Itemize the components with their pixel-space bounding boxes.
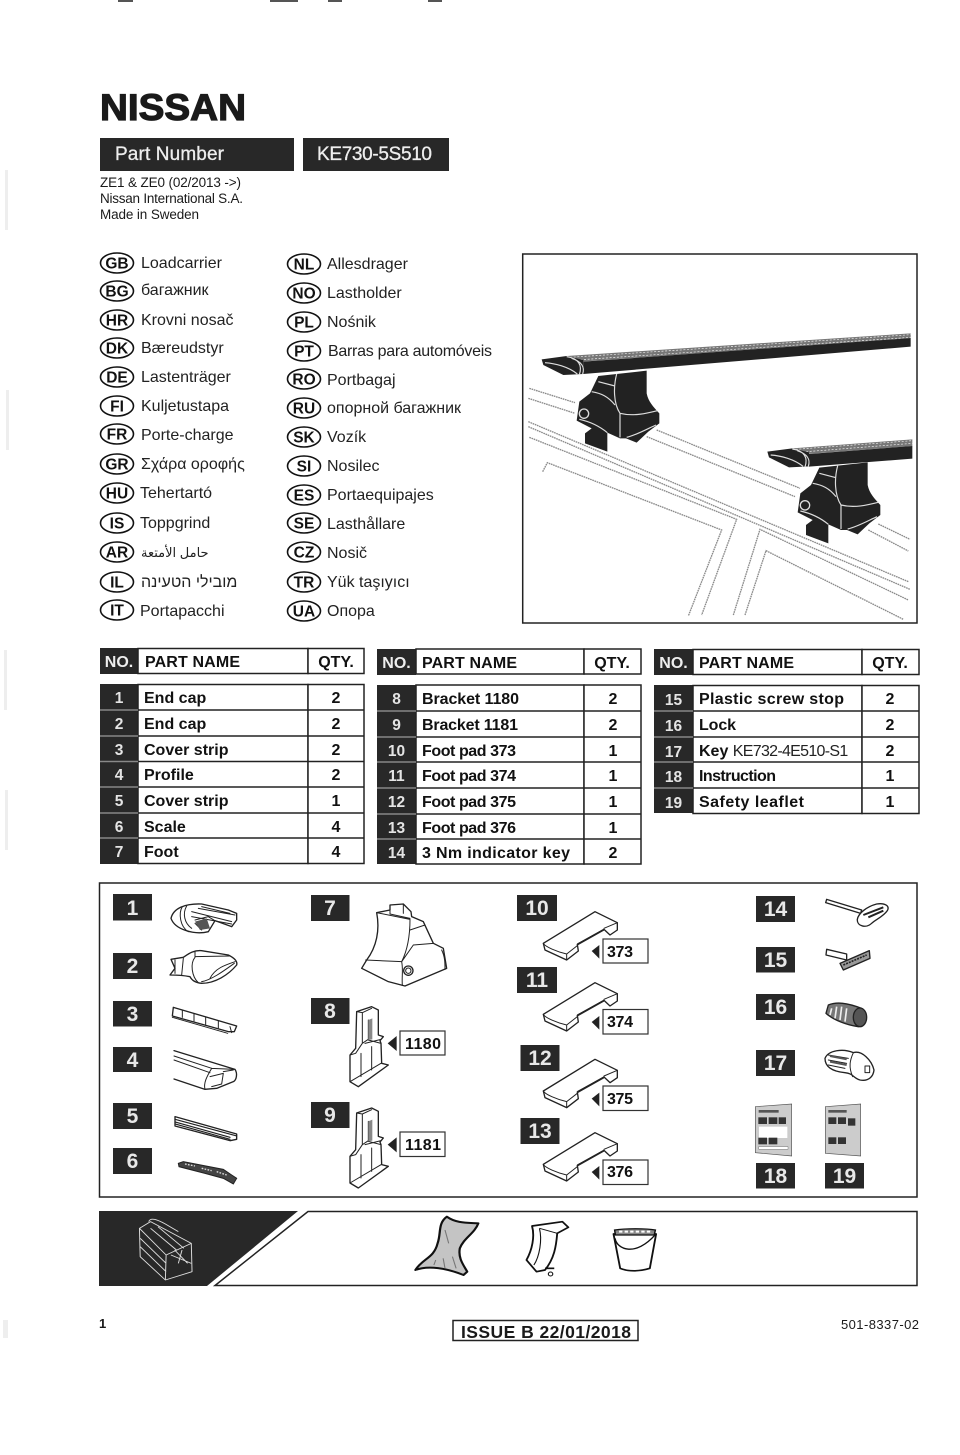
language list: right column: Nosilec — [327, 458, 379, 475]
labels: foot pad codes: 376 — [607, 1164, 633, 1181]
number badges: parts 10 to 19: 15 — [764, 949, 787, 972]
number badges: parts 10 to 19: 11 — [526, 969, 548, 992]
table: parts 1 to 7: PART NAME — [145, 654, 240, 671]
labels: foot pad codes: 373 — [607, 944, 633, 961]
scan marks — [3, 0, 442, 1338]
number badges: parts 1 to 9: 6 — [127, 1150, 138, 1173]
language list: right column: Lastholder — [327, 285, 402, 302]
language list: right column: RO — [292, 372, 316, 388]
number badges: parts 10 to 19: 12 — [528, 1047, 552, 1070]
rows 15 to 19 — [654, 685, 919, 814]
table: parts 8 to 14: QTY. — [594, 655, 630, 672]
language list: right column: NO — [292, 286, 316, 302]
part number value — [303, 138, 449, 171]
number badges: parts 1 to 9 — [113, 894, 350, 1174]
part 13: foot pad 376 — [543, 1133, 617, 1181]
language list: right column: SE — [294, 516, 314, 532]
rows 8 to 14: 2 — [609, 691, 618, 708]
document number: 501-8337-02 — [841, 1317, 919, 1332]
rows 15 to 19: 1 — [886, 768, 895, 785]
part 15: plastic screw stop — [826, 949, 870, 970]
rows 1 to 7: Cover strip — [144, 793, 229, 810]
label: 1181 — [400, 1132, 445, 1156]
language list: left column: багажник — [141, 282, 210, 299]
number badges: parts 1 to 9: 4 — [127, 1049, 139, 1072]
number badges: parts 10 to 19 — [517, 895, 864, 1188]
rows 8 to 14: Foot pad 375 — [422, 794, 516, 811]
roof bar: rear — [542, 333, 911, 375]
language list: left column: Loadcarrier — [141, 255, 223, 272]
part 7: foot — [362, 904, 447, 986]
rows 15 to 19: Safety leaflet — [699, 794, 805, 811]
table: parts 15 to 19 — [654, 649, 919, 814]
part 4: profile — [174, 1051, 237, 1089]
number badges: parts 10 to 19: 17 — [764, 1052, 787, 1075]
language list: right column: Lasthållare — [327, 515, 405, 533]
part 19: safety leaflet — [825, 1104, 861, 1156]
rows 1 to 7: 6 — [115, 819, 124, 836]
language list: right column: Allesdrager — [327, 256, 409, 273]
rows 8 to 14: 10 — [388, 743, 405, 760]
number badges: parts 1 to 9: 5 — [127, 1105, 139, 1128]
part number value: KE730-5S510 — [317, 144, 432, 165]
language list: right column: RU — [293, 400, 315, 418]
roof foot: rear — [577, 371, 659, 452]
roof bar: front — [767, 439, 912, 467]
panel: roof rack product illustration — [523, 254, 917, 623]
rows 1 to 7: Foot — [144, 844, 179, 861]
language list: left column: GB — [105, 256, 129, 272]
rows 1 to 7: 1 — [332, 793, 341, 810]
rows 15 to 19: Key KE732-4E510-S1 — [699, 743, 848, 760]
language list: right column: Vozík — [327, 429, 367, 446]
language list: right column: SK — [293, 430, 316, 446]
rows 8 to 14: 12 — [388, 794, 405, 811]
language list: right column: NL — [294, 256, 314, 274]
rows 15 to 19: Lock — [699, 717, 736, 734]
language list: left column: FI — [110, 398, 124, 416]
rows 8 to 14: 2 — [609, 717, 618, 734]
part 12: foot pad 375 — [543, 1059, 617, 1108]
part 6: scale — [178, 1162, 237, 1184]
number badges: parts 10 to 19: 19 — [833, 1165, 856, 1188]
part 11: foot pad 374 — [543, 983, 617, 1031]
rows 15 to 19: 2 — [886, 717, 895, 734]
rows 8 to 14: 9 — [392, 717, 401, 734]
language list: left column: GR — [105, 456, 129, 474]
illustrations: parts 10 to 19 — [543, 899, 888, 1181]
icon: vehicle door pillar — [526, 1222, 568, 1276]
rows 1 to 7 — [100, 684, 364, 864]
labels: foot pad codes: 374 — [607, 1014, 633, 1031]
part 18: instruction — [755, 1104, 792, 1156]
number badges: parts 1 to 9: 7 — [324, 897, 336, 920]
language list: left column: Kuljetustapa — [141, 398, 229, 415]
rows 15 to 19: 17 — [665, 744, 682, 761]
icon: cleaning rag — [415, 1217, 478, 1275]
rows 15 to 19: 18 — [665, 769, 682, 786]
panel: tools and materials band — [99, 1211, 917, 1286]
vehicle and manufacturer info: Made in Sweden — [100, 207, 199, 222]
part 9: bracket — [350, 1108, 388, 1188]
number badges: parts 1 to 9: 3 — [127, 1003, 138, 1026]
rows 8 to 14 — [377, 685, 641, 864]
part 1: end cap — [171, 904, 237, 933]
rows 8 to 14: 1 — [609, 794, 618, 811]
language list: left column: Bæreudstyr — [141, 340, 224, 357]
language list: left column: BG — [105, 284, 129, 300]
language list: right column: опорной багажник — [327, 400, 462, 417]
language list: left column: DE — [106, 370, 128, 386]
label: 1180 — [400, 1031, 445, 1055]
rows 15 to 19: 19 — [665, 795, 682, 812]
icon: bucket with foam — [614, 1229, 656, 1271]
number badges: parts 10 to 19: 13 — [528, 1120, 552, 1143]
label: 1181: 1181 — [405, 1137, 441, 1154]
language list: right column: UA — [293, 604, 315, 620]
panel: parts catalogue — [100, 883, 917, 1197]
part 5: cover strip — [175, 1117, 237, 1141]
vehicle and manufacturer info: ZE1 & ZE0 (02/2013 ->) — [100, 175, 241, 190]
rows 1 to 7: 2 — [332, 716, 341, 733]
rows 15 to 19: 2 — [886, 691, 895, 708]
rows 1 to 7: End cap — [144, 716, 206, 733]
language list: right column: Опора — [327, 603, 375, 620]
language list: right column: SI — [297, 458, 311, 476]
label: 1180: 1180 — [405, 1036, 441, 1053]
rows 1 to 7: 3 — [115, 742, 124, 759]
rows 15 to 19: Plastic screw stop — [699, 691, 844, 708]
table: parts 15 to 19: QTY. — [872, 655, 908, 672]
part 2: end cap — [170, 951, 237, 983]
rows 1 to 7: 1 — [115, 690, 124, 707]
part 14: indicator key — [826, 899, 888, 926]
rows 8 to 14: Bracket 1180 — [422, 691, 519, 708]
language list: left column: Portapacchi — [140, 603, 224, 620]
white panel — [215, 1212, 917, 1286]
number badges: parts 10 to 19: 14 — [764, 898, 787, 921]
number badges: parts 10 to 19: 10 — [525, 897, 549, 920]
number badges: parts 1 to 9: 1 — [127, 897, 139, 920]
dark toolbox panel — [99, 1211, 298, 1286]
icon: toolbox — [139, 1219, 192, 1280]
language list: right column: Nośnik — [327, 314, 377, 331]
rows 1 to 7: 5 — [115, 793, 124, 810]
language list: left column: HU — [106, 486, 128, 502]
language list: right column — [288, 254, 492, 621]
language list: left column: IT — [110, 602, 124, 620]
labels: foot pad codes — [603, 939, 648, 1184]
language list: left column: Krovni nosač — [141, 312, 234, 329]
rows 15 to 19: 1 — [886, 794, 895, 811]
language list: left column: מובילי הטעינה — [141, 573, 237, 591]
rows 15 to 19: 2 — [886, 743, 895, 760]
rows 8 to 14: 1 — [609, 820, 618, 837]
brand logo: NISSAN: NISSAN — [100, 87, 246, 128]
table: parts 15 to 19: PART NAME — [699, 655, 794, 672]
rows 1 to 7: 2 — [332, 742, 341, 759]
language list: left column: IL — [110, 574, 124, 592]
number badges: parts 1 to 9: 8 — [324, 1000, 336, 1023]
part number label — [100, 138, 294, 171]
rows 1 to 7: Scale — [144, 819, 186, 836]
arrow: bracket 1180 — [388, 1036, 397, 1051]
rows 8 to 14: Bracket 1181 — [422, 717, 518, 734]
rows 8 to 14: 11 — [388, 768, 405, 785]
language list: right column: TR — [294, 574, 314, 592]
rows 1 to 7: End cap — [144, 690, 206, 707]
rows 8 to 14: Foot pad 374 — [422, 768, 516, 785]
part 10: foot pad 373 — [543, 912, 617, 960]
table: parts 8 to 14: PART NAME — [422, 655, 517, 672]
language list: left column: IS — [110, 516, 124, 532]
number badges: parts 1 to 9: 9 — [324, 1104, 336, 1127]
page number: 1 — [99, 1316, 106, 1331]
language list: left column: Toppgrind — [140, 515, 210, 532]
language list: left column: AR — [106, 544, 128, 562]
language list: left column: DK — [106, 340, 129, 358]
rows 1 to 7: Profile — [144, 767, 194, 784]
table: parts 1 to 7 — [100, 648, 364, 864]
rows 8 to 14: 8 — [392, 691, 401, 708]
rows 8 to 14: Foot pad 376 — [422, 820, 516, 837]
rows 8 to 14: Foot pad 373 — [422, 743, 516, 760]
language list: left column — [100, 253, 245, 620]
table: parts 8 to 14 — [377, 649, 641, 864]
rows 1 to 7: 2 — [332, 767, 341, 784]
number badges: parts 10 to 19: 18 — [764, 1165, 787, 1188]
language list: left column: Tehertartó — [140, 485, 212, 502]
language list: left column: HR — [106, 312, 128, 330]
table: parts 15 to 19: NO. — [659, 655, 688, 672]
rows 1 to 7: 4 — [332, 819, 341, 836]
rows 8 to 14: 14 — [388, 845, 405, 862]
vehicle and manufacturer info — [100, 175, 243, 222]
table: parts 1 to 7: NO. — [105, 654, 133, 671]
part 16: lock — [826, 1003, 867, 1027]
rows 8 to 14: 3 Nm indicator key — [422, 845, 570, 862]
language list: left column: حامل الأمتعة — [141, 544, 209, 560]
illustrations: parts 1 to 9 — [170, 904, 447, 1188]
roof foot: front — [798, 462, 880, 543]
language list: right column: Portbagaj — [327, 372, 396, 389]
language list: left column: FR — [107, 426, 127, 444]
table: parts 1 to 7: QTY. — [318, 654, 354, 671]
table: parts 8 to 14: NO. — [382, 655, 411, 672]
rows 1 to 7: 2 — [332, 690, 341, 707]
issue label: ISSUE B 22/01/2018 — [461, 1322, 631, 1342]
language list: right column: CZ — [294, 544, 315, 562]
language list: right column: PL — [294, 314, 314, 332]
rows 8 to 14: 13 — [388, 820, 405, 837]
rows 1 to 7: 2 — [115, 716, 123, 733]
language list: left column: Σχάρα οροφής — [141, 456, 245, 473]
language list: right column: ES — [294, 488, 314, 504]
rows 15 to 19: Instruction — [699, 768, 776, 785]
language list: right column: Portaequipajes — [327, 487, 434, 504]
vehicle and manufacturer info: Nissan International S.A. — [100, 191, 243, 206]
labels: foot pad codes: 375 — [607, 1091, 633, 1108]
rows 8 to 14: 1 — [609, 743, 618, 760]
rows 1 to 7: 4 — [332, 844, 341, 861]
rows 15 to 19: 15 — [665, 692, 682, 709]
part 17: key — [825, 1050, 874, 1080]
part 8: bracket — [350, 1007, 388, 1087]
arrow: bracket 1181 — [388, 1137, 397, 1152]
number badges: parts 10 to 19: 16 — [764, 996, 787, 1019]
rows 1 to 7: 4 — [115, 767, 124, 784]
rows 15 to 19: 16 — [665, 718, 682, 735]
rows 1 to 7: 7 — [115, 844, 123, 861]
rows 8 to 14: 2 — [609, 845, 618, 862]
part number label: Part Number — [115, 144, 225, 165]
number badges: parts 1 to 9: 2 — [127, 955, 138, 978]
part 3: cover strip — [172, 1007, 237, 1033]
rows 1 to 7: Cover strip — [144, 742, 229, 759]
language list: right column: Nosič — [327, 545, 367, 562]
language list: right column: PT — [294, 344, 314, 360]
language list: right column: Barras para automóveis — [328, 343, 492, 360]
language list: left column: Lastenträger — [141, 369, 232, 386]
rows 8 to 14: 1 — [609, 768, 618, 785]
language list: left column: Porte-charge — [141, 427, 234, 444]
language list: right column: Yük taşıyıcı — [327, 574, 410, 591]
